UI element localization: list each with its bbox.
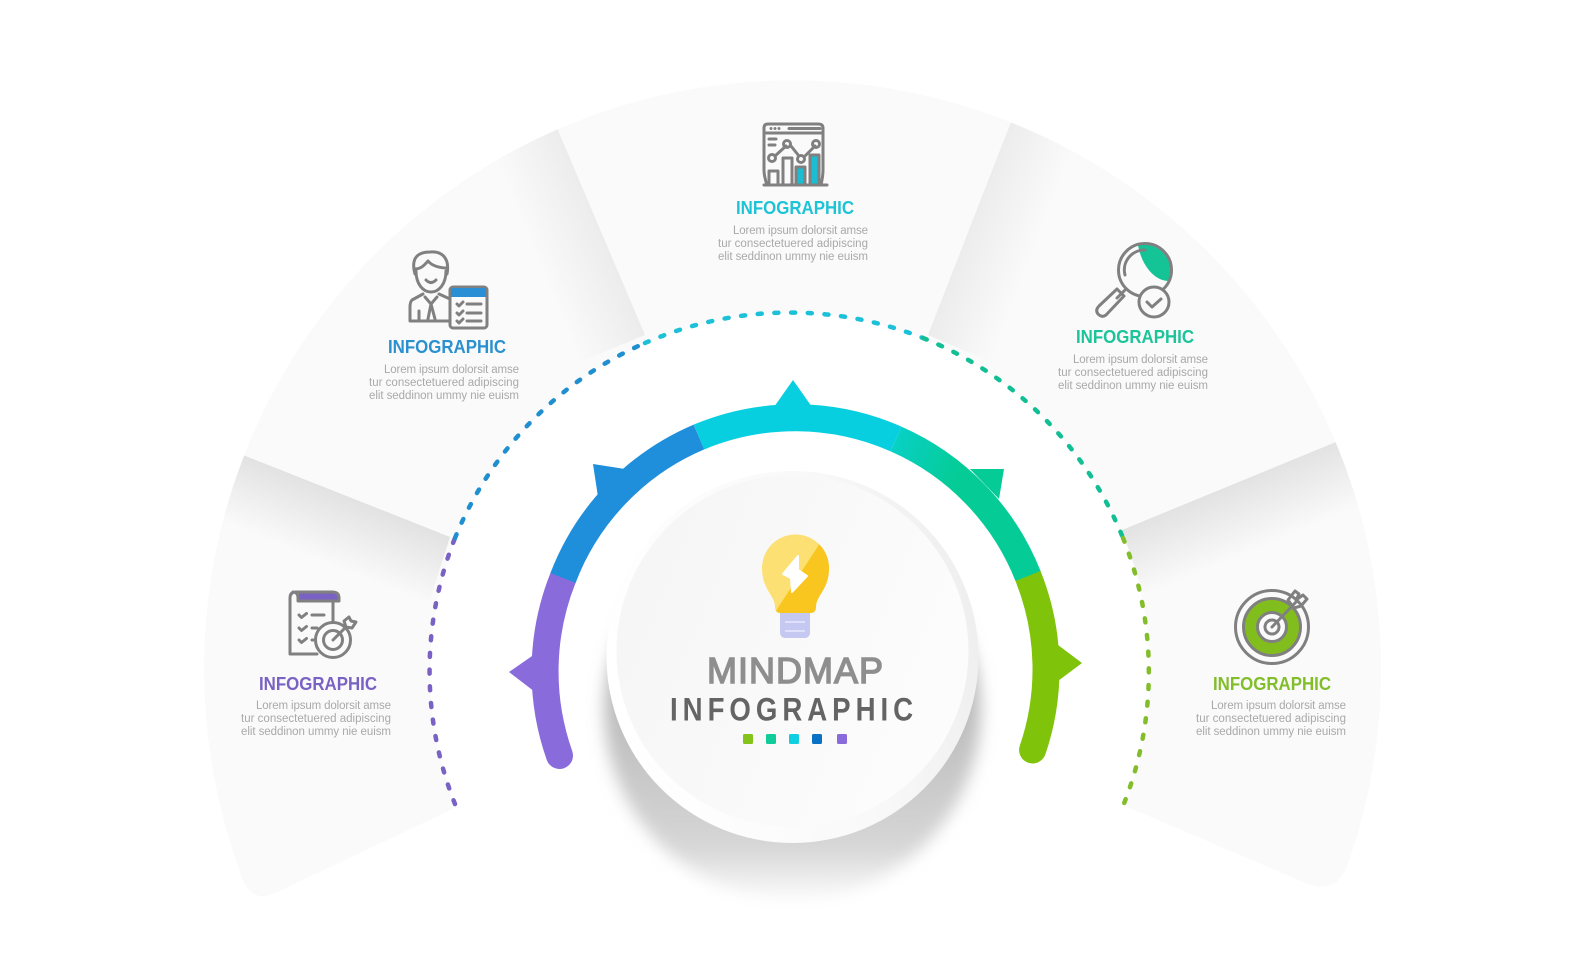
- description: Lorem ipsum dolorsit amse: [1073, 354, 1208, 366]
- heading: INFOGRAPHIC: [736, 198, 854, 218]
- color squares: [743, 734, 847, 744]
- center title: INFOGRAPHIC: [670, 692, 913, 728]
- green segment: [896, 439, 1028, 576]
- description: [718, 225, 868, 263]
- block 5: lime: [1196, 590, 1346, 738]
- white inner disc: [430, 313, 1150, 830]
- description: elit seddinon ummy nie euism: [1058, 380, 1208, 392]
- heading: INFOGRAPHIC: [259, 674, 377, 694]
- description: [241, 700, 391, 738]
- segmented colored arc with arrows: [509, 380, 1082, 756]
- center title: [670, 650, 913, 728]
- icon: browser analytics chart: [764, 124, 827, 185]
- icon: businessman with checklist: [410, 252, 487, 328]
- center circle shadow: [604, 523, 980, 899]
- description: Lorem ipsum dolorsit amse: [733, 225, 868, 237]
- description: tur consectetuered adipiscing: [241, 713, 391, 725]
- description: tur consectetuered adipiscing: [1196, 713, 1346, 725]
- heading: INFOGRAPHIC: [1076, 327, 1194, 347]
- description: elit seddinon ummy nie euism: [1196, 726, 1346, 738]
- center circle: [606, 471, 978, 843]
- purple segment: [509, 578, 563, 756]
- block 2: blue: [369, 252, 519, 402]
- description: [1058, 354, 1208, 392]
- icon: magnifier with check: [1097, 244, 1172, 317]
- heading: INFOGRAPHIC: [1213, 674, 1331, 694]
- block 4: green: [1058, 244, 1208, 392]
- dotted outer arc: [430, 313, 1149, 806]
- description: tur consectetuered adipiscing: [369, 377, 519, 389]
- description: [1196, 700, 1346, 738]
- blue segment: [563, 437, 699, 578]
- icon: checklist with target: [290, 592, 356, 658]
- description: Lorem ipsum dolorsit amse: [1211, 700, 1346, 712]
- block 1: purple: [241, 592, 391, 738]
- description: tur consectetuered adipiscing: [1058, 367, 1208, 379]
- mindmap infographic: [226, 122, 1356, 893]
- description: elit seddinon ummy nie euism: [718, 251, 868, 263]
- heading: INFOGRAPHIC: [388, 337, 506, 357]
- cyan segment: [699, 380, 896, 439]
- description: [369, 364, 519, 402]
- center title: MINDMAP: [707, 650, 883, 691]
- block 3: cyan: [718, 124, 868, 263]
- icon: target with arrow: [1236, 590, 1308, 664]
- description: Lorem ipsum dolorsit amse: [384, 364, 519, 376]
- icon: light bulb: [762, 534, 829, 638]
- fan background panel: [226, 122, 1356, 596]
- description: elit seddinon ummy nie euism: [241, 726, 391, 738]
- description: elit seddinon ummy nie euism: [369, 390, 519, 402]
- lime segment: [1028, 576, 1082, 750]
- description: Lorem ipsum dolorsit amse: [256, 700, 391, 712]
- description: tur consectetuered adipiscing: [718, 238, 868, 250]
